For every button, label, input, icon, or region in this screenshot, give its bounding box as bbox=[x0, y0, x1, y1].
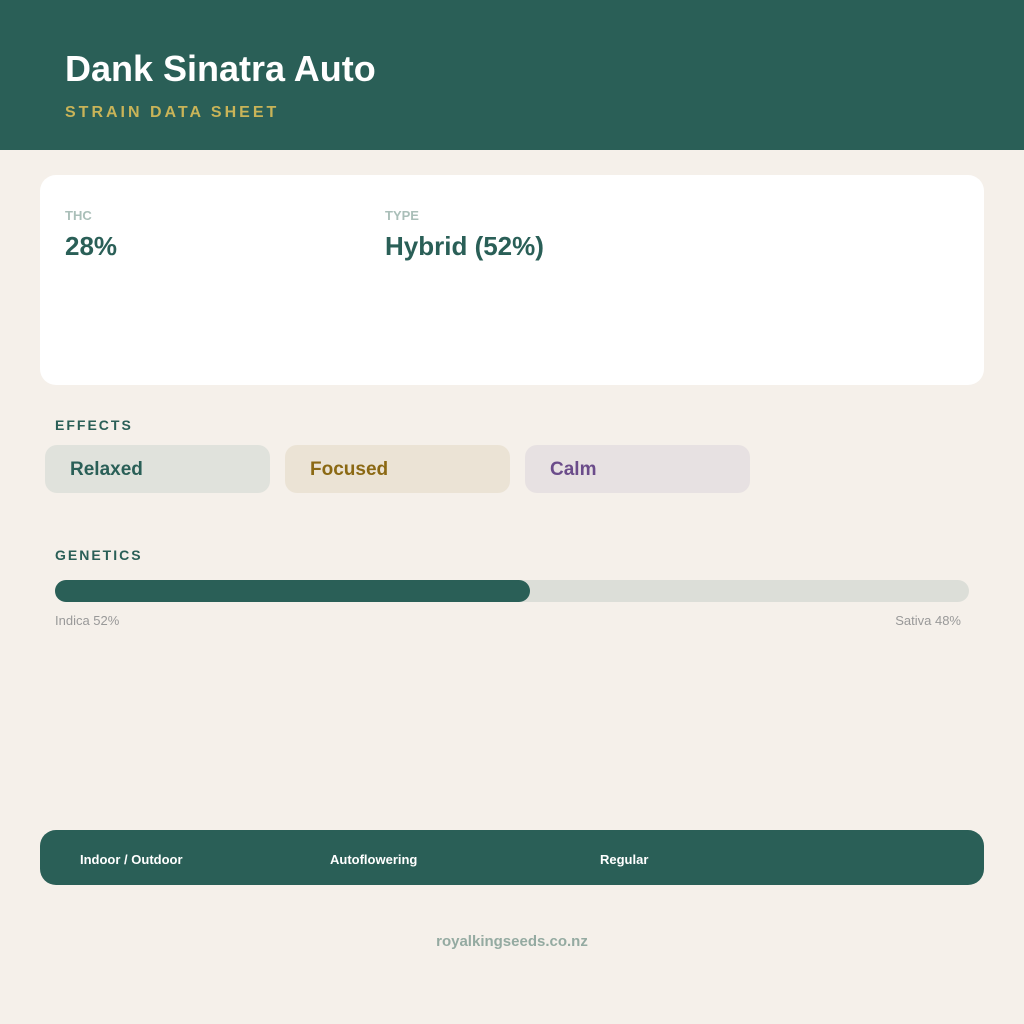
label: sativa: Sativa 48% bbox=[895, 613, 961, 628]
footer website: royalkingseeds.co.nz bbox=[436, 933, 588, 950]
stat label: THC: THC bbox=[65, 208, 92, 223]
attribute: environment: Indoor / Outdoor bbox=[80, 852, 183, 867]
panel: strain stats card bbox=[40, 175, 984, 385]
header band bbox=[0, 0, 1024, 150]
subtitle: STRAIN DATA SHEET bbox=[65, 104, 279, 121]
label: indica: Indica 52% bbox=[55, 613, 119, 628]
title: Dank Sinatra Auto bbox=[65, 48, 376, 89]
effect pill: focused: Focused bbox=[310, 459, 388, 480]
panel: growing attributes bbox=[40, 830, 984, 885]
effect pill: relaxed bbox=[45, 445, 270, 493]
attribute: seed type: Regular bbox=[600, 852, 648, 867]
stat value: THC: 28% bbox=[65, 231, 117, 261]
heading: effects: EFFECTS bbox=[55, 417, 133, 433]
effect pill: calm bbox=[525, 445, 750, 493]
effect pill: relaxed: Relaxed bbox=[70, 459, 143, 480]
indica share fill bbox=[55, 580, 530, 602]
stat label: type: TYPE bbox=[385, 208, 419, 223]
attribute: flowering: Autoflowering bbox=[330, 852, 417, 867]
effect pill: focused bbox=[285, 445, 510, 493]
genetics bar bbox=[55, 580, 969, 602]
stat value: type: Hybrid (52%) bbox=[385, 231, 544, 261]
effect pill: calm: Calm bbox=[550, 459, 596, 480]
heading: genetics: GENETICS bbox=[55, 547, 143, 563]
